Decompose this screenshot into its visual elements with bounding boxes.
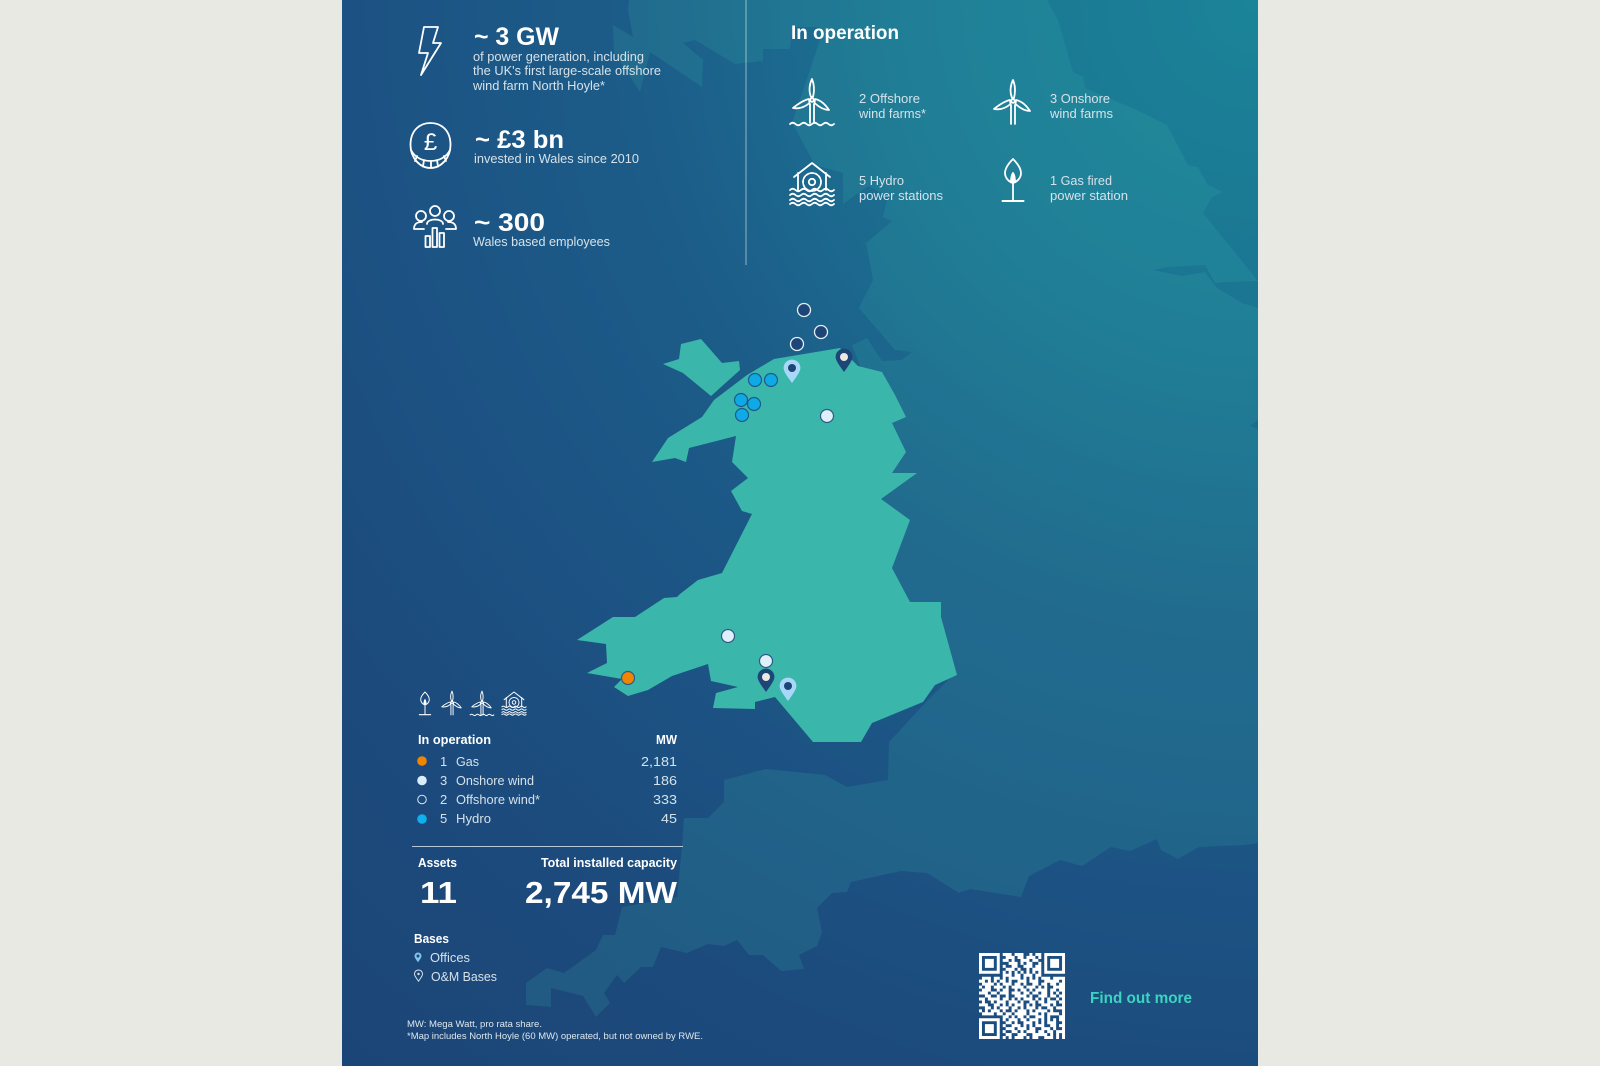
icon: gas flame [1002,159,1024,201]
markers: onshore wind [722,410,834,668]
icon: pound coin [410,123,450,168]
stat: power generation [419,23,661,93]
row: gas: Gas [456,754,479,769]
legend: small asset icons [419,691,526,716]
icon: onshore turbine [994,80,1030,124]
row: offshore wind [418,792,677,807]
row: hydro: 5 [440,811,447,826]
legend: bases: O&M Bases [431,969,497,984]
footnote [407,1019,703,1042]
row: offshore wind: Offshore wind* [456,792,540,807]
total: assets: Assets [418,855,457,870]
stat value: ~ £3 bn [475,126,564,154]
label: power station [1050,188,1128,203]
stat description: of power generation, including [473,49,644,64]
total: installed capacity: Total installed capacity [541,855,678,870]
total: assets: 11 [420,875,457,910]
item: gas fired power station [1002,159,1128,203]
icon: pound coin: £ [424,129,437,156]
row: onshore wind: 3 [440,773,447,788]
icon: people and bars [414,206,456,247]
row: gas: 1 [440,754,447,769]
stat description: Wales based employees [473,234,610,249]
icon: hydro house [790,163,834,205]
icon: offshore turbine [790,79,834,125]
footnote: MW: Mega Watt, pro rata share. [407,1019,542,1030]
legend table: in operation [417,732,678,826]
stat: investment [410,123,639,168]
label: wind farms [1049,106,1113,121]
icon: O&M pin [414,970,423,981]
heading: in operation: In operation [791,23,899,44]
stat description: invested in Wales since 2010 [474,151,639,166]
map: Anglesey [663,339,740,396]
row: onshore wind: 186 [653,773,677,788]
total: installed capacity [525,855,678,910]
marker: O&M base pin south [758,669,774,692]
row: onshore wind [417,773,677,788]
marker: office pin south [780,678,796,701]
map: Great Britain land mass [526,0,1258,1017]
label: power stations [859,188,943,203]
label: 2 Offshore [859,91,920,106]
row: onshore wind: Onshore wind [456,773,534,788]
row: offshore wind: 2 [440,792,447,807]
marker: O&M base pin north [836,349,852,372]
stat value: ~ 3 GW [474,23,559,51]
QR code [979,954,1065,1038]
legend: bases: Bases [414,931,449,946]
markers: offshore wind [790,304,828,350]
legend: bases [414,931,497,984]
row: hydro: 45 [661,811,677,826]
total: installed capacity: 2,745 MW [525,875,678,910]
map: Wales [577,348,957,742]
legend: bases: Offices [430,950,470,965]
row: gas [417,754,677,769]
table header [418,732,678,747]
stat description [472,49,661,93]
row: hydro [417,811,677,826]
icon: lightning bolt [419,27,441,75]
label: 5 Hydro [859,173,904,188]
label: wind farms* [858,106,926,121]
item: onshore wind farms [994,80,1113,124]
markers: hydro [734,374,778,422]
call to action: find out more: Find out more [1090,990,1192,1007]
label [1049,91,1113,121]
label [859,173,943,203]
table header: In operation [418,732,491,747]
label [858,91,926,121]
stat description: the UK's first large-scale offshore [473,63,661,78]
icon: office pin [414,952,422,962]
item: offshore wind farms [790,79,926,125]
item: hydro power stations [790,163,943,205]
stat description: wind farm North Hoyle* [472,78,605,93]
stat value: ~ 300 [474,209,545,237]
stat: employees [414,206,610,249]
panel: map background [342,0,1258,1066]
marker: gas [622,672,634,684]
marker: office pin north [784,360,800,383]
row: gas: 2,181 [641,754,677,769]
table header: MW [656,732,678,747]
label [1050,173,1128,203]
footnote: *Map includes North Hoyle (60 MW) operated, but not owned by RWE. [407,1031,703,1042]
total: assets [418,855,457,910]
row: hydro: Hydro [456,811,491,826]
label: 3 Onshore [1050,91,1110,106]
label: 1 Gas fired [1050,173,1112,188]
row: offshore wind: 333 [653,792,677,807]
